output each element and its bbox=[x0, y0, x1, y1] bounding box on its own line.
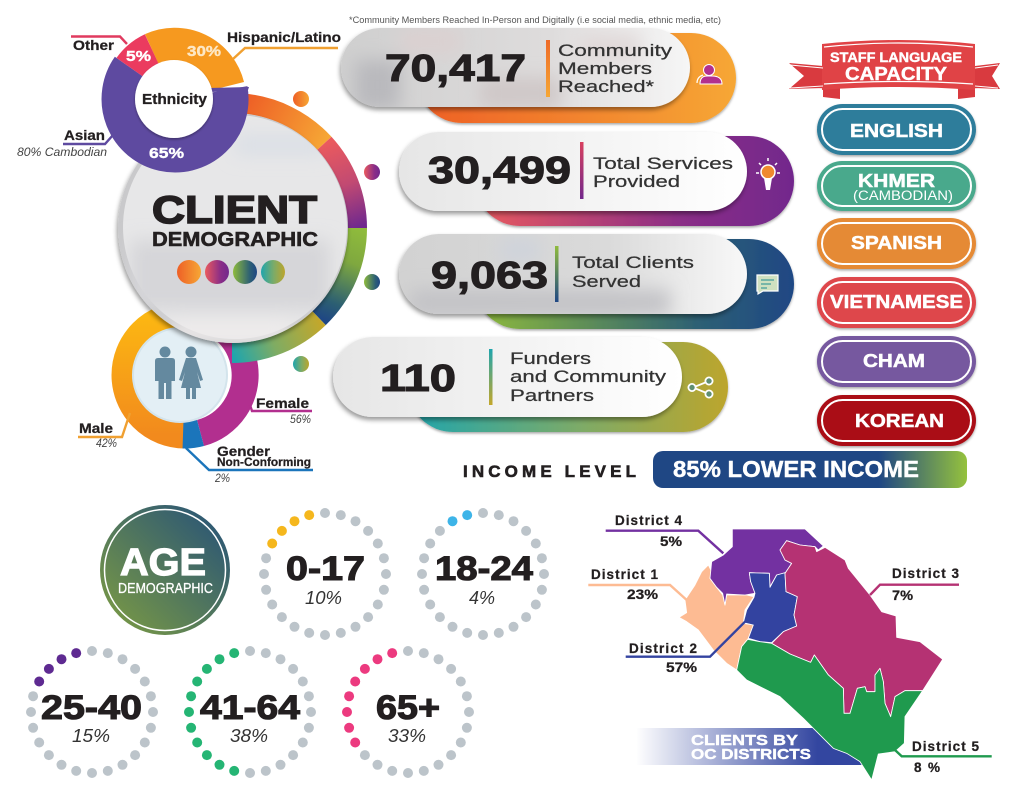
district 4 bbox=[710, 529, 823, 605]
age ring: 18-24 bbox=[417, 508, 549, 640]
language badge: Khmer: (CAMBODIAN) bbox=[853, 188, 953, 203]
age ring: 18-24: 4% bbox=[469, 588, 495, 608]
age demographic badge: AGE bbox=[120, 542, 206, 584]
label: District 2 bbox=[626, 622, 745, 675]
donut chart: ethnicity: 5% bbox=[126, 48, 151, 65]
language badge: Spanish: SPANISH bbox=[851, 232, 942, 253]
language badge: Khmer: KHMER bbox=[858, 170, 935, 191]
label: District 5: 8 % bbox=[914, 760, 940, 775]
banner: clients by OC districts: OC DISTRICTS bbox=[691, 746, 811, 763]
age ring: 41-64: 41-64 bbox=[200, 689, 300, 727]
caption: Partners bbox=[510, 386, 594, 405]
faded photo bbox=[130, 135, 330, 342]
caption: Provided bbox=[593, 172, 680, 191]
label: Hispanic/Latino bbox=[227, 30, 341, 59]
label: Gender Non-Conforming: Non-Conforming bbox=[217, 455, 311, 469]
icon: chat bubble bbox=[757, 275, 778, 294]
gradient dots bbox=[177, 260, 285, 284]
label: District 1 bbox=[588, 567, 687, 602]
label: District 5 bbox=[895, 739, 992, 775]
value: 9,063 bbox=[431, 255, 548, 297]
label: Asian: Asian bbox=[64, 128, 105, 143]
label: Asian: 80% Cambodian bbox=[17, 147, 107, 159]
age ring: 65+: 33% bbox=[388, 726, 426, 746]
district 1 bbox=[679, 565, 754, 670]
language badge: Khmer bbox=[817, 161, 976, 211]
label: District 4: 5% bbox=[660, 534, 682, 549]
banner: clients by OC districts bbox=[636, 728, 863, 765]
heading: INCOME LEVEL bbox=[463, 462, 636, 481]
stat panel: total clients served bbox=[399, 234, 794, 329]
language badge: English bbox=[817, 104, 976, 155]
age ring: 65+: 65+ bbox=[376, 689, 440, 727]
ribbon: staff language capacity bbox=[789, 40, 1000, 99]
language badge: English: ENGLISH bbox=[850, 120, 943, 141]
subtitle: DEMOGRAPHIC bbox=[152, 228, 318, 251]
age ring: 65+ bbox=[342, 646, 474, 778]
income level bbox=[463, 451, 967, 488]
stat panel: community members reached bbox=[341, 28, 736, 123]
value: 30,499 bbox=[428, 150, 571, 192]
value labels: 30% bbox=[187, 43, 221, 60]
caption: and Community bbox=[510, 367, 667, 386]
decorative bubbles bbox=[293, 91, 380, 372]
caption: Total Clients bbox=[572, 253, 694, 272]
age ring: 41-64: 38% bbox=[230, 726, 268, 746]
label: Hispanic/Latino: Hispanic/Latino bbox=[227, 30, 341, 45]
ribbon: staff language capacity: CAPACITY bbox=[845, 64, 947, 84]
district 5 bbox=[737, 639, 923, 780]
label: Gender Non-Conforming bbox=[186, 444, 313, 485]
caption: Community bbox=[558, 41, 673, 60]
title: CLIENT bbox=[152, 189, 317, 232]
caption: Funders bbox=[510, 349, 591, 368]
label: Female bbox=[250, 396, 312, 426]
icon: man and woman bbox=[155, 346, 203, 399]
label: Asian bbox=[17, 128, 113, 159]
client demographic badge bbox=[118, 104, 357, 353]
age demographic badge bbox=[100, 505, 230, 635]
stat panel: funders and community partners bbox=[333, 337, 728, 432]
donut chart: gender bbox=[125, 315, 245, 435]
age ring: 25-40: 15% bbox=[72, 726, 110, 746]
footnote: *Community Members Reached In-Person and Digitally (i.e social media, ethnic media, etc) bbox=[349, 15, 721, 26]
donut chart: ethnicity bbox=[120, 43, 249, 162]
age ring: 0-17 bbox=[259, 508, 391, 640]
district 2 bbox=[743, 573, 797, 643]
caption: Served bbox=[572, 272, 641, 291]
age demographic badge: DEMOGRAPHIC bbox=[118, 581, 213, 597]
caption: Members bbox=[558, 59, 652, 78]
label: District 2: District 2 bbox=[629, 641, 697, 656]
ribbon: staff language capacity: STAFF LANGUAGE bbox=[830, 50, 962, 65]
label: District 3: 7% bbox=[892, 588, 913, 603]
caption bbox=[558, 41, 673, 96]
banner: clients by OC districts: CLIENTS BY bbox=[691, 732, 798, 749]
label: District 4: District 4 bbox=[615, 513, 682, 528]
icon: light bulb bbox=[756, 158, 780, 190]
label: Gender Non-Conforming: Gender bbox=[217, 444, 271, 459]
label: Other bbox=[71, 36, 127, 53]
label: Gender Non-Conforming: 2% bbox=[214, 473, 230, 485]
caption: Total Services bbox=[593, 154, 733, 173]
label: District 2: 57% bbox=[666, 660, 697, 675]
donut chart: ethnicity: 65% bbox=[149, 145, 184, 162]
icon: people bbox=[697, 64, 722, 84]
age ring: 25-40: 25-40 bbox=[41, 689, 142, 727]
language badge: Vietnamese: VIETNAMESE bbox=[830, 291, 963, 312]
age ring: 18-24: 18-24 bbox=[435, 550, 533, 588]
label: District 3 bbox=[870, 566, 959, 603]
language badge: Cham bbox=[817, 336, 976, 387]
language badge: Spanish bbox=[817, 218, 976, 269]
district 3 bbox=[772, 541, 943, 717]
age ring: 0-17: 0-17 bbox=[286, 550, 365, 588]
label: Male: 42% bbox=[96, 438, 117, 450]
map: OC districts bbox=[679, 529, 943, 780]
donut center label: Ethnicity bbox=[142, 91, 208, 108]
age ring: 25-40 bbox=[26, 646, 158, 778]
caption bbox=[593, 154, 733, 191]
language badge: Korean bbox=[817, 395, 976, 446]
label: Female: 56% bbox=[290, 414, 311, 426]
caption bbox=[572, 253, 694, 291]
income level: 85% LOWER INCOME bbox=[673, 456, 919, 482]
label: Other: Other bbox=[73, 38, 115, 53]
icon: share bbox=[688, 377, 713, 398]
label: Male bbox=[78, 413, 130, 450]
language badge: Vietnamese bbox=[817, 277, 976, 328]
age ring: 0-17: 10% bbox=[305, 588, 342, 608]
label: District 4 bbox=[606, 513, 723, 553]
label: District 5: District 5 bbox=[912, 739, 979, 754]
value: 70,417 bbox=[385, 48, 526, 90]
gradient ring bbox=[232, 104, 357, 353]
language badge: Cham: CHAM bbox=[863, 350, 925, 371]
value: 110 bbox=[380, 358, 456, 400]
label: District 1: 23% bbox=[627, 587, 658, 602]
stat panel: total services provided bbox=[399, 132, 794, 226]
age ring: 41-64 bbox=[184, 646, 316, 778]
caption: Reached* bbox=[558, 77, 654, 96]
language badge: Korean: KOREAN bbox=[855, 410, 944, 431]
caption bbox=[510, 349, 667, 405]
label: District 1: District 1 bbox=[591, 567, 658, 582]
label: District 3: District 3 bbox=[892, 566, 959, 581]
label: Female: Female bbox=[256, 396, 310, 411]
label: Male: Male bbox=[79, 421, 114, 436]
income bar bbox=[653, 451, 967, 488]
